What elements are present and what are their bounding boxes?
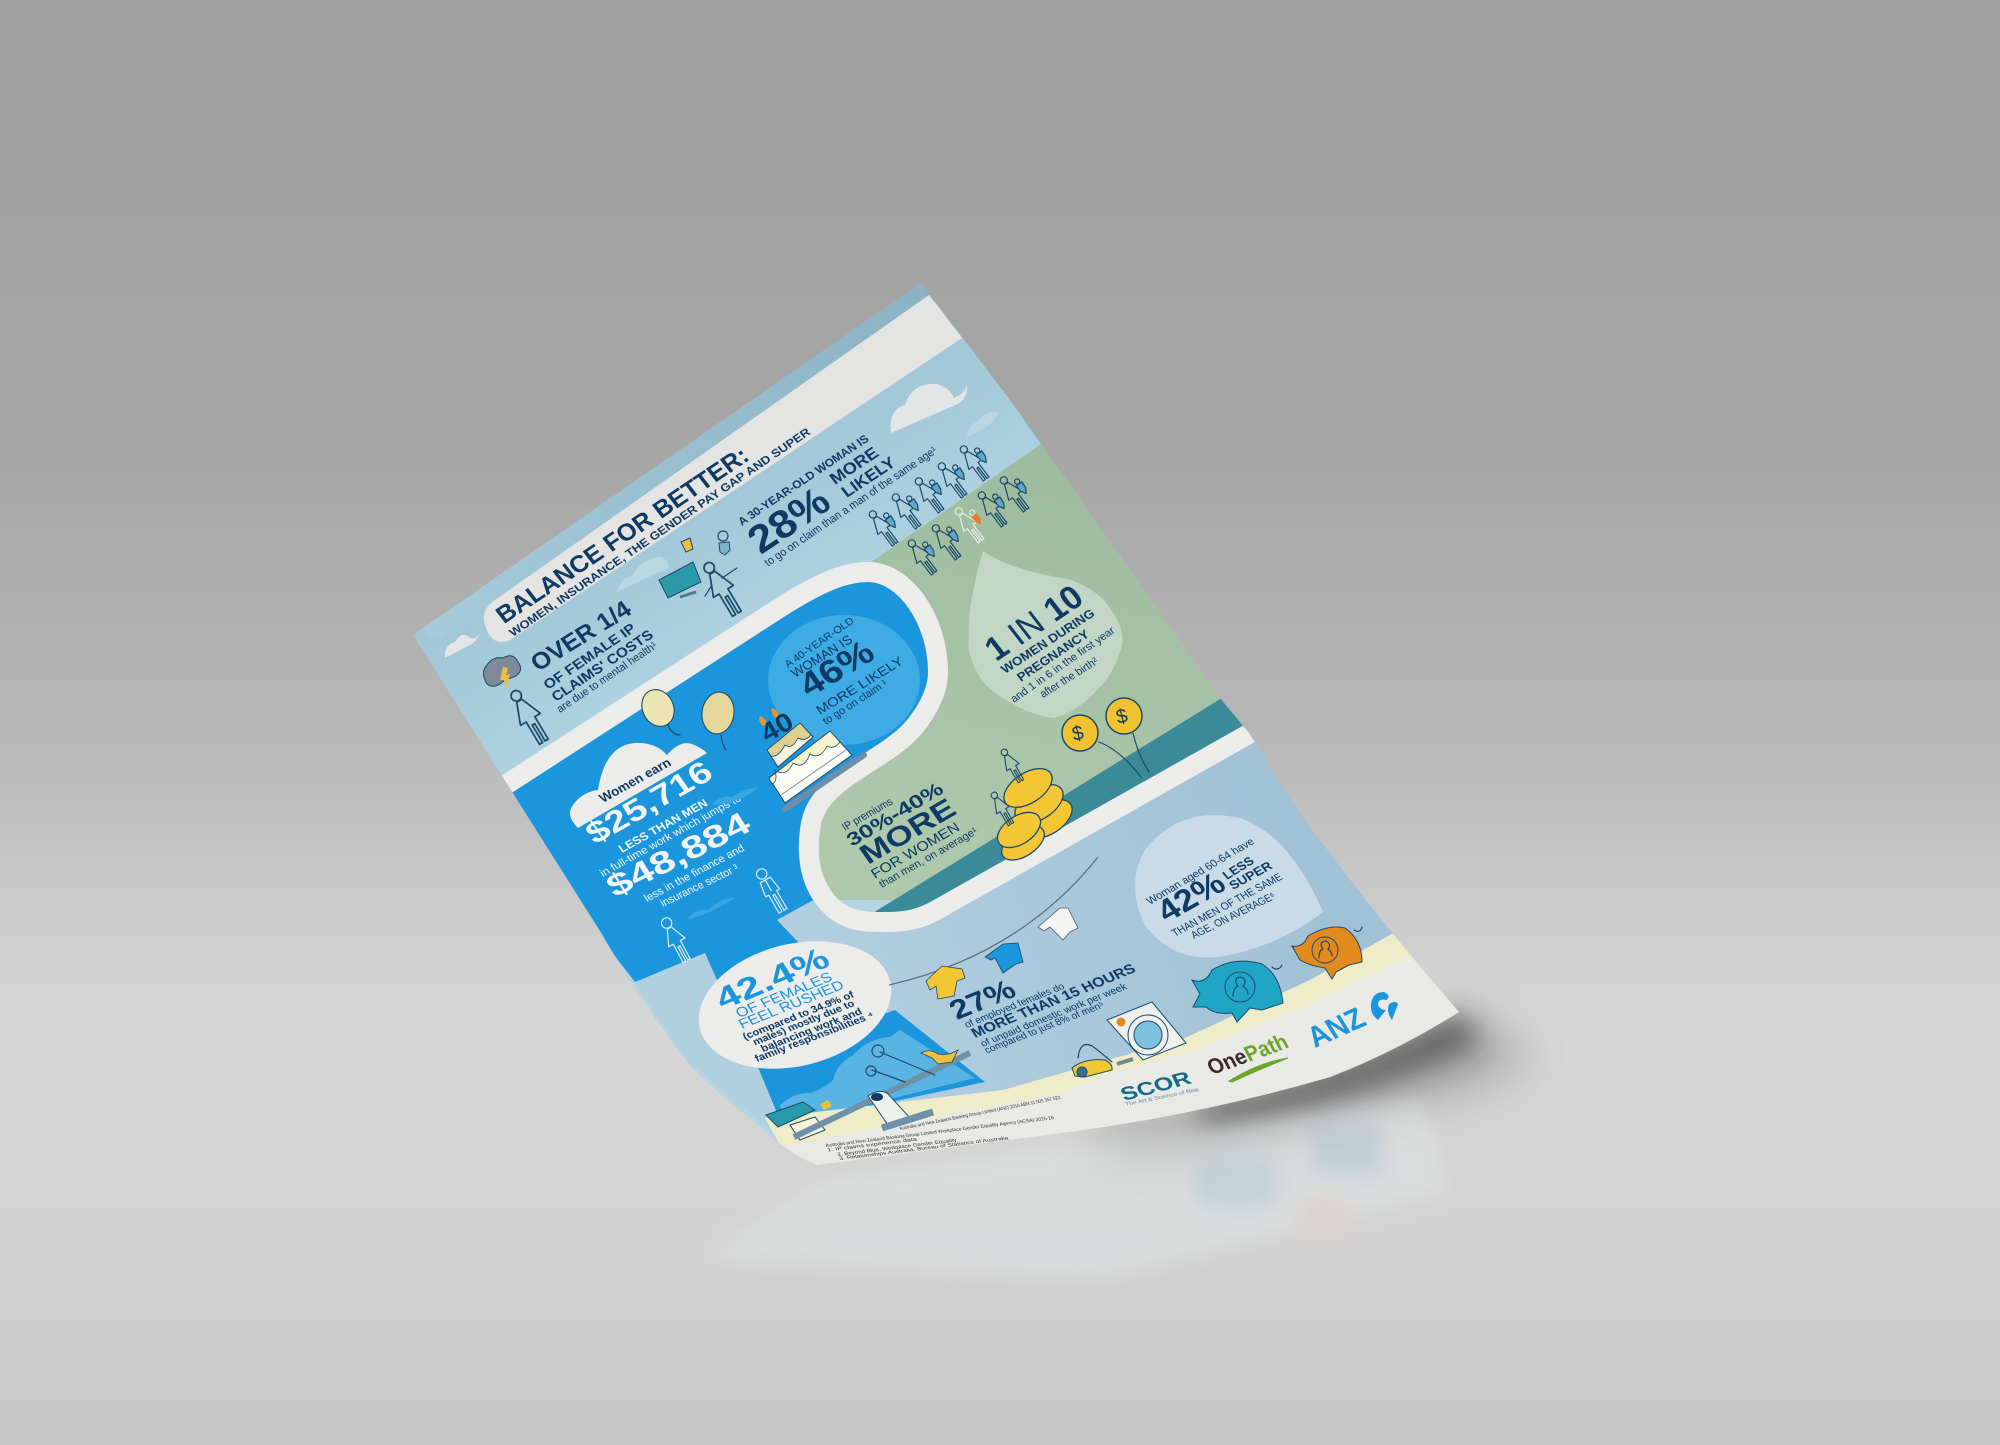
monitor: [766, 1102, 815, 1127]
plate: [785, 755, 864, 809]
line: SUPER: [1226, 859, 1275, 892]
line: OF FEMALES: [732, 969, 835, 1021]
figure: [703, 562, 742, 618]
sand strip: [765, 932, 1412, 1147]
text more likely: MORE LIKELY: [813, 653, 906, 717]
line: LESS: [1220, 854, 1257, 882]
icon: faint cloud: [967, 412, 998, 437]
symbol: [1371, 992, 1398, 1020]
papers: [790, 1117, 825, 1140]
line: compared to just 8% of men⁵: [983, 1000, 1107, 1056]
line 3: are due to mental health¹: [554, 640, 660, 715]
note: than men, on average¹: [877, 825, 980, 890]
bright blue area: [507, 582, 928, 982]
line: 2. Beyond Blue, Workplace Gender Equality: [837, 1137, 959, 1158]
subtitle: WOMEN, INSURANCE, THE GENDER PAY GAP AND SUPER: [507, 426, 814, 639]
heading: [491, 426, 814, 639]
faint clouds: [687, 788, 758, 920]
icon: coin stacks with figures: [986, 746, 1079, 867]
icon: storm cloud: [484, 656, 521, 686]
stat: 42%: [1149, 865, 1232, 929]
white shirt: [1038, 908, 1078, 940]
icon: small cloud: [445, 633, 480, 658]
dollar sign: $: [1114, 705, 1130, 729]
line: (compared to 34.9% of: [741, 990, 857, 1043]
panel: 28% more likely: [736, 433, 940, 569]
yellow bag: [681, 538, 693, 552]
top dark stripe: [420, 283, 936, 630]
stat: OVER 1/4: [526, 596, 637, 677]
top tier: [767, 723, 813, 767]
line: males) mostly due to: [751, 999, 857, 1048]
title: BALANCE FOR BETTER:: [491, 442, 754, 629]
stat 28%: 28%: [739, 479, 839, 562]
footer paper: [784, 956, 1459, 1165]
tagline: The Art & Science of Risk: [1125, 1087, 1200, 1108]
icon: big cloud: [891, 380, 967, 433]
bar: [794, 1053, 970, 1137]
panel: 1 in 10 drop: [968, 551, 1123, 718]
swoosh: [1229, 1058, 1288, 1082]
full-time: in full-time work which jumps to: [598, 793, 744, 879]
stat: 1 IN 10: [978, 578, 1091, 668]
sheet shadow: [1100, 1012, 1530, 1160]
line: THAN MEN OF THE SAME: [1170, 871, 1285, 939]
text woman is: WOMAN IS: [788, 632, 856, 680]
more: MORE: [854, 792, 962, 870]
panel: IP premiums: IP premiums: [840, 796, 896, 833]
line: MORE THAN 15 HOURS: [968, 960, 1138, 1041]
light cloud inside triangle: [780, 1030, 975, 1113]
stat range: 30%-40%: [843, 779, 948, 851]
text note: to go on claim than a man of the same age¹: [762, 445, 940, 569]
bubble: [1135, 815, 1323, 958]
icon: washing machine: [1107, 1002, 1186, 1060]
candle flames: [759, 708, 779, 726]
title band: [484, 295, 962, 642]
figures: [872, 1052, 935, 1082]
logo: SCOR: SCOR: [1117, 1068, 1195, 1106]
text more: MORE: [826, 443, 882, 488]
line: AGE, ON AVERAGE⁶: [1189, 891, 1278, 941]
line 1: WOMEN DURING: [998, 606, 1097, 676]
icon: washing line: [889, 857, 1098, 999]
shield figure: [718, 531, 728, 541]
white S band: [490, 572, 1270, 922]
icon: coin balloons: [1062, 698, 1149, 777]
panel: 46% more likely: A 40-YEAR-OLD: [782, 615, 857, 670]
drop shape: [968, 551, 1123, 718]
cloud text: Women earn: [596, 755, 674, 805]
line: FEEL RUSHED: [735, 977, 847, 1032]
logo: SCOR: [1117, 1068, 1200, 1108]
monitor: [659, 562, 701, 598]
circle: 40 year old panel: [768, 615, 920, 745]
lower light blue area: [858, 742, 1392, 1100]
blue shirt: [985, 943, 1023, 973]
panel: IP premiums: [840, 779, 980, 890]
line: balancing work and: [759, 1007, 864, 1055]
footnotes: [825, 1095, 1063, 1162]
green field: [818, 444, 1220, 900]
footnotes: Australia and New Zealand Banking Group Limited (ANZ) 2016 ABN 11 005 357 522.: [898, 1095, 1063, 1132]
line 2: CLAIMS' COSTS: [548, 626, 656, 704]
bright triangle under circle: [758, 1010, 985, 1111]
number 40: 40: [755, 706, 799, 748]
stat 46%: 46%: [792, 633, 881, 705]
for women: FOR WOMEN: [868, 819, 962, 881]
icon: cloud: [570, 743, 707, 828]
text likely: LIKELY: [838, 453, 899, 501]
text intro: A 30-YEAR-OLD WOMAN IS: [736, 433, 872, 528]
line: 1. IP claims experience data: [827, 1137, 918, 1153]
text to go on claim: to go on claim ¹: [821, 678, 890, 727]
insurance sector: insurance sector ³: [658, 862, 742, 910]
icon: lightning: [500, 667, 510, 690]
panel: 42.4% females rushed: [685, 922, 905, 1088]
less than men: LESS THAN MEN: [617, 798, 710, 855]
less in finance: less in the finance and: [642, 843, 747, 904]
yellow bag: [820, 1100, 832, 1110]
icon: woman at computer: [659, 531, 747, 620]
icon: balloons: [636, 684, 737, 750]
line 1: OF FEMALE IP: [540, 620, 639, 692]
icon group: rows of women: [868, 445, 1030, 576]
dollar sign: $: [1070, 722, 1086, 746]
stat: 42.4%: [708, 941, 836, 1016]
line: of unpaid domestic work per week: [979, 981, 1130, 1050]
logo: OnePath: OnePath: [1203, 1029, 1292, 1079]
line: Australia and New Zealand Banking Group Limited Workplace Gender Equality Agency (ACSA) 2015-16: [825, 1115, 1055, 1149]
panel: women earn: [570, 743, 790, 965]
panel: 42% less super: [1135, 815, 1323, 958]
yellow shirt: [926, 966, 965, 999]
icon: woman outline: [656, 914, 695, 965]
line: Woman aged 60-64 have: [1144, 836, 1257, 907]
icon: seesaw: [766, 1045, 970, 1140]
line: 3. Relationships Australia, Bureau of Statistics of Australia: [839, 1135, 1010, 1162]
lower tier: [769, 731, 852, 803]
line 3: and 1 in 6 in the first year: [1008, 625, 1118, 705]
line: of employed females do: [963, 981, 1067, 1031]
icon: birthday cake: [755, 706, 864, 809]
panel: over 1/4: [484, 596, 660, 748]
icon: teal piggy bank: [1192, 961, 1283, 1022]
reflection of the sheet: [700, 1100, 1450, 1280]
panel: 27% domestic work: 27%: [943, 973, 1021, 1025]
icon: orange piggy bank: [1292, 927, 1362, 979]
icon: man outline: [752, 865, 790, 915]
icon: vacuum cleaner: [1072, 1044, 1133, 1077]
poster sheet: [413, 283, 1459, 1165]
logo: ANZ: [1301, 992, 1398, 1054]
highlighted white figure: [954, 507, 984, 544]
line 2: PREGNANCY: [1014, 627, 1092, 684]
fulcrum: [868, 1091, 912, 1128]
circle: [685, 922, 905, 1088]
panel: 27% domestic work: [943, 960, 1138, 1056]
panel: 46% more likely: [782, 615, 906, 727]
stat 48,884: $48,884: [599, 805, 757, 904]
icon: faint cloud behind text: [617, 557, 668, 592]
sky background: [413, 283, 1459, 1164]
line: family responsibilities ⁴: [753, 1010, 876, 1065]
line 4: after the birth²: [1038, 656, 1101, 700]
stat 25,716: $25,716: [579, 754, 719, 851]
teal ground band: [875, 698, 1246, 912]
logo: ANZ: ANZ: [1301, 1002, 1372, 1054]
dog: [921, 1050, 958, 1064]
icon: woman: [510, 690, 550, 746]
